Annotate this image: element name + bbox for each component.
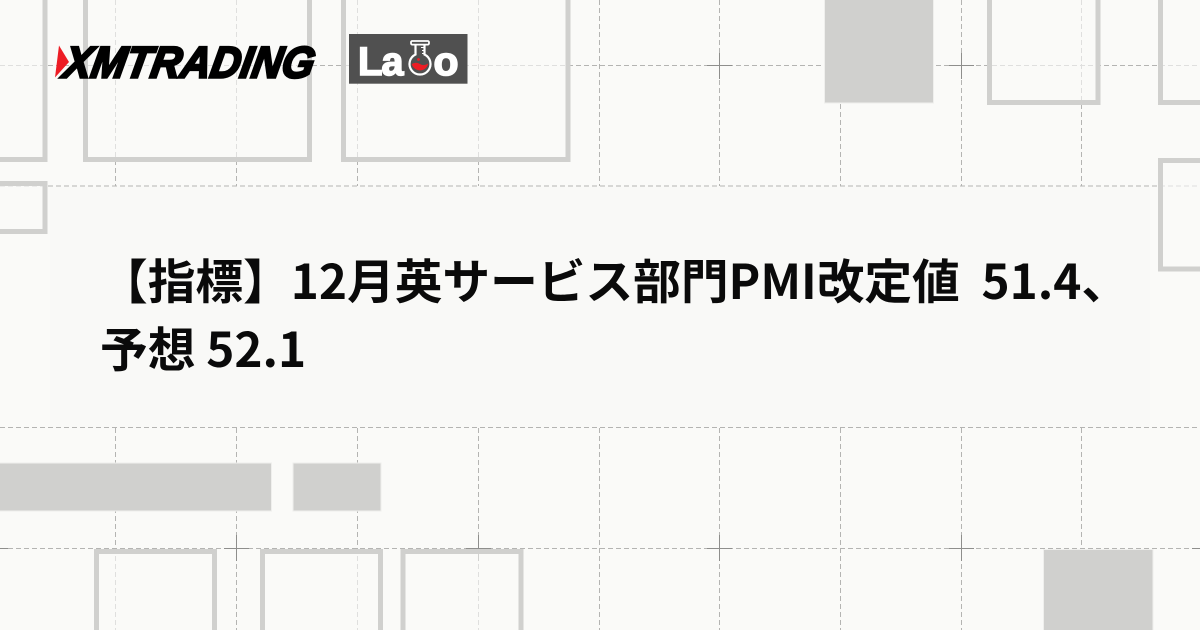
outlined squares, bottom row [96,552,521,630]
wordmark letters [358,40,458,84]
logo: Lab [349,34,468,84]
icon: red arrow [55,46,69,78]
wordmark letters: L [358,40,382,84]
icon: flask [410,41,430,74]
logo: XMTRADING [55,40,319,84]
wordmark letters: o [434,40,458,84]
central panel tint [50,187,1150,427]
title: 【指標】12月英サービス部門PMI改定値 51.4、 予想 52.1 [100,244,1129,381]
outlined squares, top row [0,0,1200,269]
wordmark letters: a [382,40,404,84]
